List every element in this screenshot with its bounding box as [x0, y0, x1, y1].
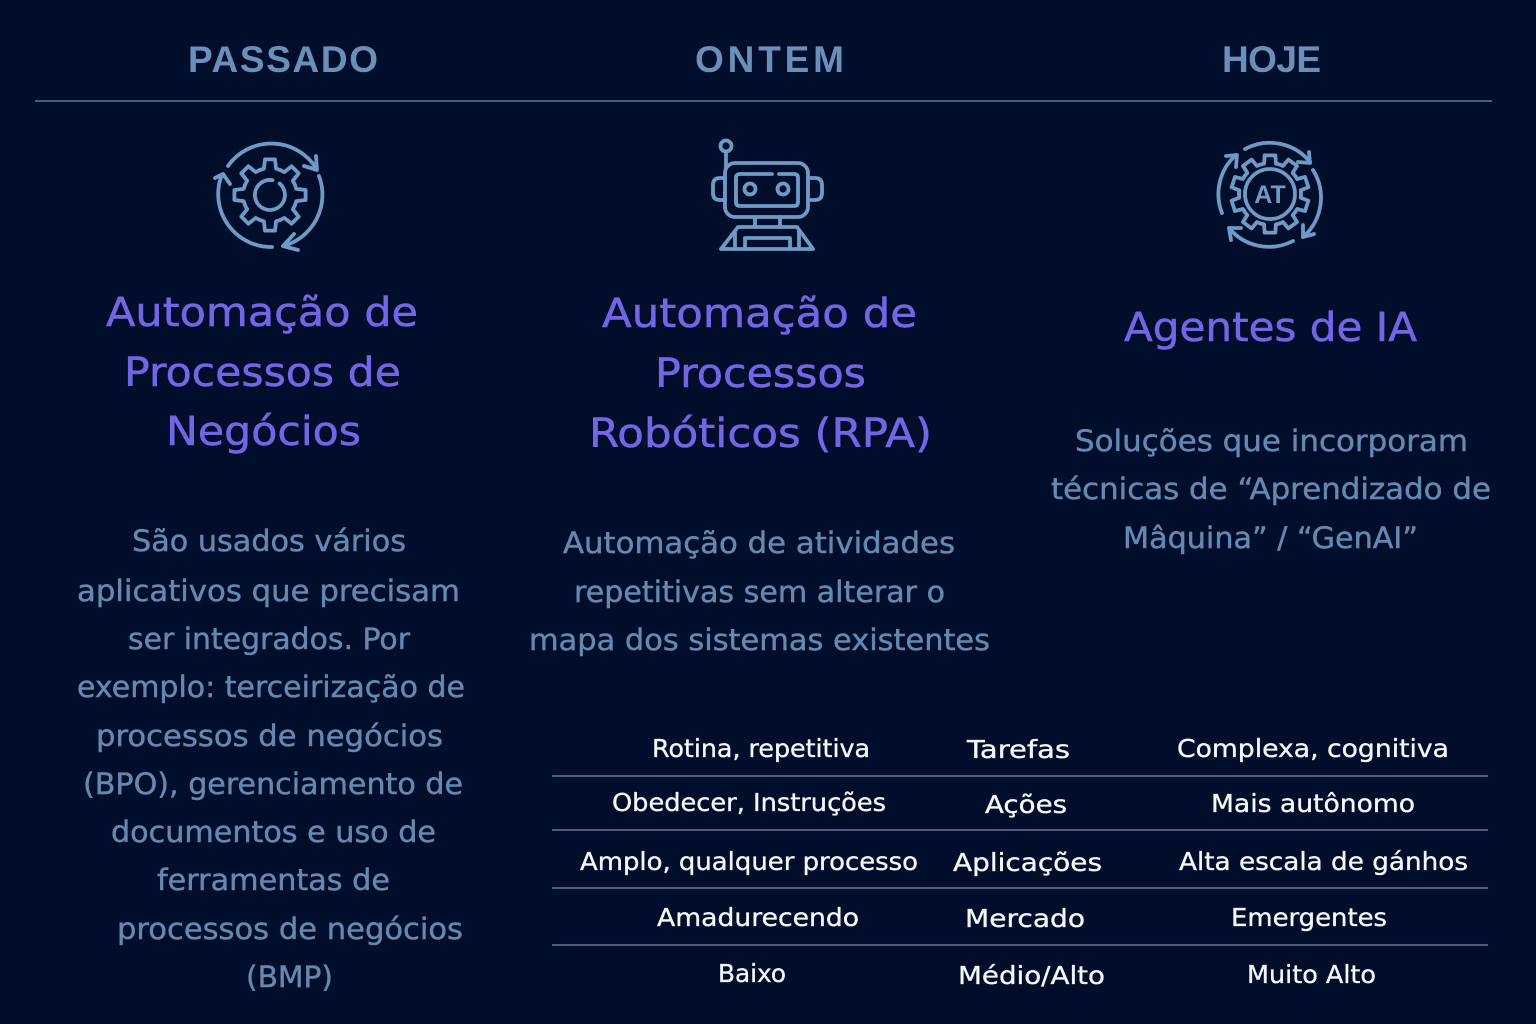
text block: passado description: aplicativos que precisam	[77, 574, 460, 608]
text block: passado description: processos de negócios	[96, 719, 443, 753]
text block: passado description: documentos e uso de	[111, 815, 436, 849]
title: Automação de Processos Robóticos (RPA): Robóticos (RPA)	[589, 411, 932, 457]
comparison table: Baixo	[718, 959, 786, 988]
text block: passado description: processos de negócios	[117, 912, 463, 946]
text block: ontem description: mapa dos sistemas existentes	[529, 623, 990, 657]
comparison table: Mais autônomo	[1211, 789, 1415, 818]
text block: passado description: ser integrados. Por	[128, 622, 410, 656]
icon: robot	[713, 140, 822, 249]
comparison table: Alta escala de gánhos	[1179, 847, 1468, 876]
comparison table	[552, 734, 1488, 990]
column headings: HOJE	[1222, 39, 1321, 80]
text block: passado description: ferramentas de	[157, 863, 390, 897]
text block: hoje description: Soluções que incorporam	[1075, 424, 1468, 458]
title: Automação de Processos Robóticos (RPA): Automação de	[602, 291, 917, 337]
icon: AT gear with arrows	[1218, 143, 1321, 247]
comparison table: Tarefas	[966, 735, 1070, 764]
comparison table: Ações	[985, 790, 1067, 819]
column headings: PASSADO	[188, 39, 378, 80]
comparison table: Emergentes	[1231, 903, 1387, 932]
icon: gear with circular arrows	[215, 144, 322, 250]
title: Automação de Processos de Negócios	[106, 290, 418, 455]
text block: passado description: exemplo: terceirização de	[77, 670, 465, 704]
title: Automação de Processos de Negócios: Automação de	[106, 290, 418, 336]
comparison table: Obedecer, Instruções	[612, 788, 886, 817]
comparison table: Médio/Alto	[958, 961, 1105, 990]
comparison table: Amadurecendo	[657, 903, 859, 932]
text block: passado description: (BMP)	[246, 960, 333, 994]
icon: AT gear with arrows: AT	[1254, 181, 1286, 209]
title: Agentes de IA: Agentes de IA	[1124, 305, 1418, 351]
text block: passado description: São usados vários	[132, 524, 406, 558]
title: Automação de Processos de Negócios: Processos de	[124, 350, 401, 396]
text block: passado description	[77, 524, 465, 994]
text block: hoje description: Mâquina” / “GenAI”	[1123, 521, 1418, 555]
comparison table: Aplicações	[953, 848, 1102, 877]
text block: hoje description	[1051, 424, 1491, 555]
column headings	[188, 39, 1321, 80]
title: Automação de Processos de Negócios: Negócios	[166, 409, 361, 455]
comparison table: Mercado	[965, 904, 1085, 933]
title: Automação de Processos Robóticos (RPA)	[589, 291, 932, 457]
comparison table: Amplo, qualquer processo	[580, 847, 918, 876]
text block: ontem description: repetitivas sem alterar o	[574, 575, 945, 609]
text block: hoje description: técnicas de “Aprendizado de	[1051, 472, 1491, 506]
text block: ontem description: Automação de atividades	[563, 526, 955, 560]
comparison table: Rotina, repetitiva	[652, 734, 870, 763]
text block: passado description: (BPO), gerenciamento de	[83, 767, 463, 801]
comparison table: Complexa, cognitiva	[1177, 734, 1449, 763]
text block: ontem description	[529, 526, 990, 657]
comparison table: Muito Alto	[1247, 960, 1376, 989]
title: Automação de Processos Robóticos (RPA): Processos	[655, 351, 866, 397]
column headings: ONTEM	[695, 39, 844, 80]
